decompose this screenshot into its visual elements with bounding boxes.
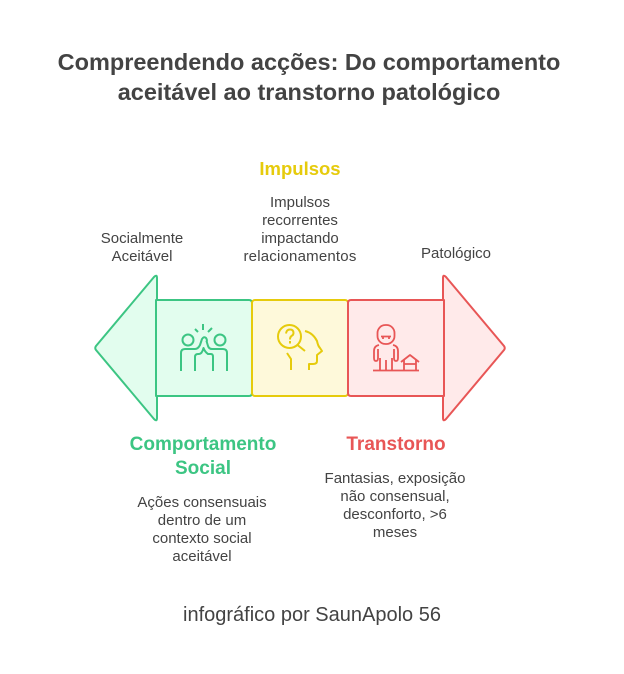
heading: Comportamento Social [130, 434, 276, 479]
icon: figure with house [373, 325, 419, 370]
text: Comportamento Social description [137, 494, 267, 565]
text: Comportamento Social description: dentro de um [158, 512, 246, 529]
segment: red [348, 300, 444, 396]
icon: high five [181, 324, 227, 371]
text: Impulsos description: impactando [261, 230, 339, 247]
text: Comportamento Social description: aceitável [172, 548, 232, 565]
title: Compreendendo acções: Do comportamento [58, 49, 560, 75]
heading: Comportamento Social: Comportamento [130, 434, 276, 455]
segment: green [156, 300, 252, 396]
text: Transtorno description: meses [373, 524, 417, 541]
text: Impulsos description: relacionamentos [243, 248, 357, 265]
icon: head with question magnifier [278, 325, 322, 370]
heading: Impulsos: Impulsos [259, 158, 341, 179]
text: Comportamento Social description: Ações consensuais [137, 494, 267, 511]
text: Transtorno description: Fantasias, exposição [325, 470, 465, 487]
heading: Comportamento Social: Social [175, 458, 231, 479]
text: Transtorno description: não consensual, [340, 488, 450, 505]
text: Transtorno description: desconforto, >6 [343, 506, 447, 523]
label: Socialmente Aceitável [101, 230, 183, 265]
left arrow head [95, 276, 157, 420]
title [58, 49, 560, 105]
label: Socialmente Aceitável: Aceitável [112, 248, 172, 265]
label: Patológico: Patológico [421, 245, 491, 262]
text: Comportamento Social description: contexto social [152, 530, 252, 547]
right arrow head [443, 276, 505, 420]
segment: yellow [252, 300, 348, 396]
text: Impulsos description: recorrentes [262, 212, 338, 229]
text: Impulsos description [243, 194, 357, 265]
text: Impulsos description: Impulsos [270, 194, 330, 211]
heading: Transtorno: Transtorno [346, 434, 446, 455]
title: aceitável ao transtorno patológico [118, 78, 500, 104]
text: Transtorno description [325, 470, 465, 541]
footer credit: infográfico por SaunApolo 56 [183, 604, 441, 626]
label: Socialmente Aceitável: Socialmente [101, 230, 183, 247]
